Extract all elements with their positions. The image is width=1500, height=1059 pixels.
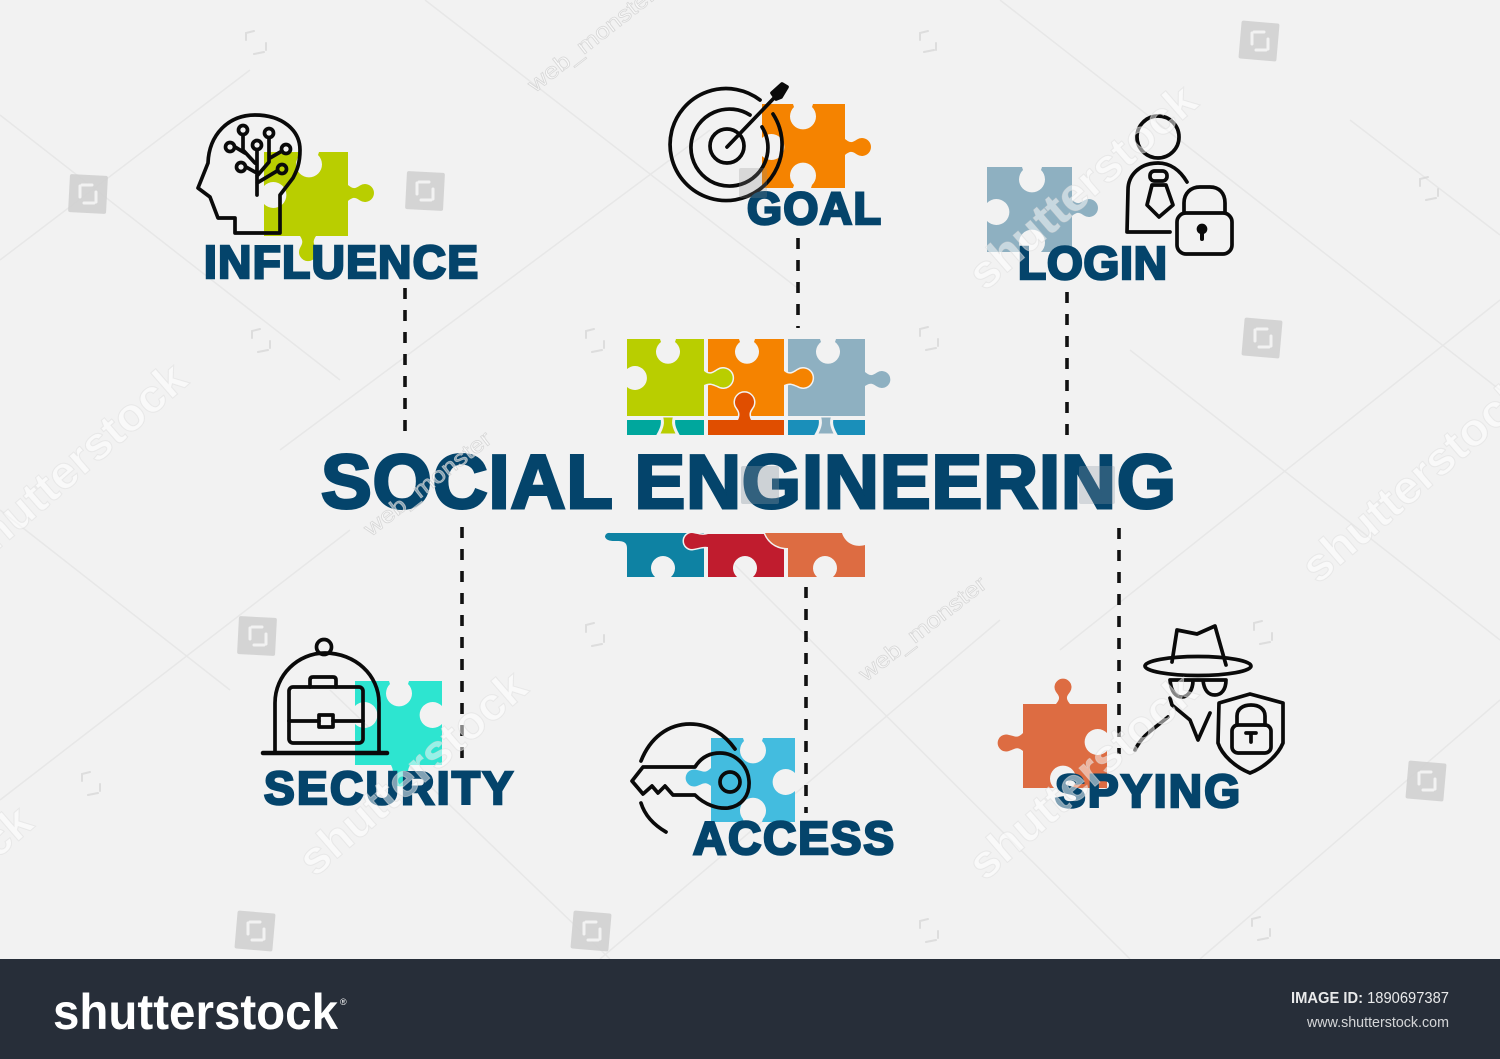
footer logo: shutterstock (53, 984, 338, 1040)
puzzle piece: turquoise (355, 681, 442, 787)
puzzle piece: orange (708, 339, 813, 416)
panel: login (987, 116, 1232, 289)
watermark overlay: web_monster (853, 571, 991, 687)
heading: goal: GOAL (747, 183, 881, 234)
icon: key in arc (632, 724, 749, 832)
heading: access: ACCESS (693, 812, 894, 864)
watermark overlay: shutterstock (287, 659, 537, 886)
icon: target with arrow (670, 84, 787, 201)
registered mark: ® (340, 997, 347, 1007)
footer bar (0, 959, 1500, 1059)
puzzle piece: dark orange tab (708, 393, 784, 435)
dashed connector: spying (1117, 528, 1121, 754)
icon: spy with shield lock (1135, 626, 1283, 773)
puzzle piece: coral (998, 679, 1107, 788)
title: SOCIAL ENGINEERING (321, 440, 1176, 525)
image id: IMAGE ID: 1890697387 (1291, 990, 1449, 1007)
puzzle piece: cyan (686, 738, 795, 822)
puzzle piece: coral (765, 533, 865, 577)
panel: security (263, 640, 513, 814)
icon: head with circuit brain (198, 115, 300, 233)
puzzle row: lower strip (627, 416, 865, 435)
panel: influence (198, 115, 478, 288)
panel: spying (998, 626, 1283, 817)
puzzle piece: slate blue (788, 339, 890, 416)
puzzle piece: orange (762, 104, 871, 188)
heading: security: SECURITY (264, 762, 513, 814)
dashed connector: influence (403, 288, 407, 432)
heading: login: LOGIN (1018, 237, 1167, 289)
puzzle piece: green (627, 339, 733, 416)
watermark overlay: shutterstock (957, 663, 1207, 890)
central puzzle top (627, 339, 890, 435)
panel: goal (670, 84, 881, 234)
website: www.shutterstock.com (1306, 1015, 1449, 1031)
icon: person with padlock (1127, 116, 1232, 254)
dashed connector: security (460, 527, 464, 758)
heading: spying: SPYING (1055, 765, 1240, 817)
puzzle piece: slate blue (987, 167, 1098, 252)
puzzle piece: teal (605, 533, 704, 577)
dashed connector: access (804, 587, 808, 813)
dashed connector: login (1065, 292, 1069, 435)
watermark overlay: web_monster (358, 426, 496, 542)
heading: influence: INFLUENCE (204, 236, 478, 288)
icon: briefcase under dome (263, 640, 387, 753)
watermark overlay: shutterstock (957, 73, 1207, 300)
panel: access (632, 724, 894, 864)
dashed connector: goal (796, 238, 800, 328)
central puzzle bottom (605, 533, 865, 577)
puzzle piece: green (264, 152, 374, 261)
puzzle piece: red (684, 533, 784, 577)
